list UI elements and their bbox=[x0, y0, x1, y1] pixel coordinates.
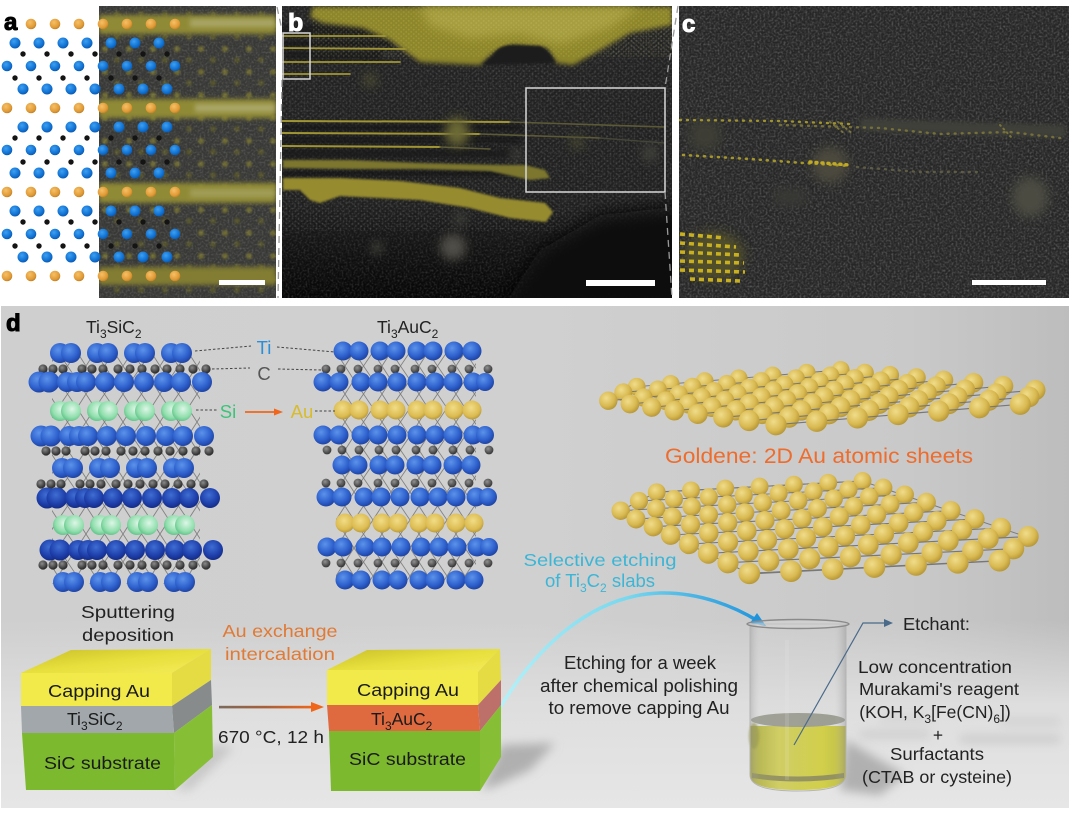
label c: c bbox=[682, 11, 695, 38]
element key: Ti, C, Si to Au bbox=[195, 337, 335, 422]
text: etchant: + bbox=[933, 725, 943, 745]
stack text: Capping Au bbox=[357, 680, 459, 700]
sample stack: Ti3AuC2 bbox=[327, 649, 501, 791]
bright gold monolayers bbox=[282, 36, 665, 149]
formula Ti3AuC2: AuC bbox=[398, 317, 432, 337]
arrow: thermal exchange bbox=[218, 702, 324, 747]
text: etching conditions: to remove capping Au bbox=[548, 698, 730, 718]
crystal structure: Ti3AuC2 bbox=[314, 317, 498, 590]
label: selective etching: of Ti bbox=[545, 570, 580, 591]
formula Ti3AuC2: 2 bbox=[432, 327, 439, 341]
gold cluster bbox=[680, 232, 745, 281]
label: Au exchange intercalation: Au exchange bbox=[222, 621, 338, 641]
stack text bbox=[44, 681, 161, 773]
stack text: Ti bbox=[371, 709, 385, 729]
formula Ti3SiC2: SiC bbox=[107, 317, 135, 337]
atom lattice bbox=[2, 19, 180, 281]
formula Ti3SiC2: 3 bbox=[100, 327, 107, 341]
formula Ti3AuC2: 3 bbox=[391, 327, 398, 341]
text: etchant: 6 bbox=[993, 712, 1000, 726]
stack text: Ti bbox=[67, 709, 81, 729]
label: Au exchange intercalation bbox=[222, 621, 338, 664]
leader arrow to etchant bbox=[794, 619, 893, 745]
STEM image a bbox=[99, 6, 276, 298]
label: selective etching: slabs bbox=[607, 570, 655, 591]
gold atom rows bbox=[680, 120, 1060, 172]
text: etching conditions: after chemical polishing bbox=[540, 676, 738, 696]
text: etchant: Etchant: bbox=[903, 614, 970, 634]
beaker with etchant bbox=[747, 620, 905, 795]
label: selective etching: 3 bbox=[580, 581, 587, 595]
stack text: 2 bbox=[426, 719, 433, 733]
label b: b bbox=[288, 9, 303, 37]
stack text: AuC bbox=[392, 709, 426, 729]
grey particles bbox=[689, 119, 1065, 217]
panel c: high magnification STEM image bbox=[679, 6, 1069, 298]
background bbox=[1, 306, 1069, 808]
text: etchant: ]) bbox=[1000, 702, 1011, 722]
zoom inset boxes bbox=[283, 33, 665, 192]
crystal structure: Ti3SiC2 bbox=[28, 317, 223, 592]
element key: Ti, C, Si to Au: Si bbox=[220, 401, 236, 422]
text: etchant: [Fe(CN) bbox=[931, 702, 993, 722]
dark bands between layers bbox=[282, 26, 522, 176]
panel a: crystal model over STEM image bbox=[2, 6, 276, 298]
text: etchant: Surfactants bbox=[890, 744, 984, 764]
panel b: STEM overview image bbox=[282, 6, 690, 310]
element key: Ti, C, Si to Au: C bbox=[257, 363, 271, 384]
stack text: SiC substrate bbox=[349, 749, 466, 769]
element key: Ti, C, Si to Au: Au bbox=[291, 401, 313, 422]
text: etchant: 3 bbox=[924, 712, 931, 726]
gold capping region bbox=[310, 7, 672, 65]
label: sputtering deposition: deposition bbox=[82, 625, 174, 645]
gold sheets and particles bbox=[283, 74, 658, 260]
formula Ti3AuC2: Ti bbox=[377, 317, 391, 337]
label: selective etching: Selective etching bbox=[524, 550, 676, 570]
text: etching conditions: Etching for a week bbox=[564, 653, 717, 673]
scale bar c bbox=[972, 280, 1046, 285]
condition text: 670 °C, 12 h bbox=[218, 727, 324, 747]
goldene sheet, top bbox=[598, 360, 1046, 436]
label a: a bbox=[4, 9, 18, 36]
label d: d bbox=[6, 310, 21, 337]
label: sputtering deposition: Sputtering bbox=[81, 602, 175, 622]
element key: Ti, C, Si to Au: Ti bbox=[257, 337, 271, 358]
dashed zoom lines between panels bbox=[277, 6, 678, 298]
stack text: Capping Au bbox=[48, 681, 150, 701]
stack text bbox=[349, 680, 466, 769]
text: etchant: Murakami's reagent bbox=[859, 679, 1019, 699]
text: etchant bbox=[858, 614, 1019, 787]
text: etching conditions bbox=[540, 653, 738, 718]
text: etchant: (CTAB or cysteine) bbox=[862, 767, 1012, 787]
text: etchant: Low concentration bbox=[858, 657, 1012, 677]
scale bar a bbox=[219, 280, 265, 285]
sample stack: Ti3SiC2 bbox=[21, 649, 213, 790]
curved arrow: etching bbox=[501, 593, 766, 706]
scale bar b bbox=[586, 280, 655, 286]
label: sputtering deposition bbox=[81, 602, 175, 645]
label: selective etching: 2 bbox=[600, 581, 607, 595]
text: etchant: (KOH, K bbox=[859, 702, 924, 722]
panel d: synthesis scheme bbox=[1, 306, 1069, 808]
stack text: 3 bbox=[385, 719, 392, 733]
dark lower right area bbox=[504, 198, 672, 298]
stack text: 3 bbox=[81, 719, 88, 733]
label: selective etching bbox=[524, 550, 676, 595]
block shadows bbox=[175, 743, 555, 790]
formula Ti3SiC2: 2 bbox=[135, 327, 142, 341]
stack text: SiC bbox=[88, 709, 116, 729]
label: selective etching: C bbox=[587, 570, 600, 591]
stack text: 2 bbox=[116, 719, 123, 733]
stack text: SiC substrate bbox=[44, 753, 161, 773]
goldene sheet, bottom bbox=[611, 471, 1039, 585]
label: Au exchange intercalation: intercalation bbox=[225, 644, 335, 664]
formula Ti3SiC2: Ti bbox=[86, 317, 100, 337]
heading: Goldene: Goldene: 2D Au atomic sheets bbox=[665, 445, 973, 468]
